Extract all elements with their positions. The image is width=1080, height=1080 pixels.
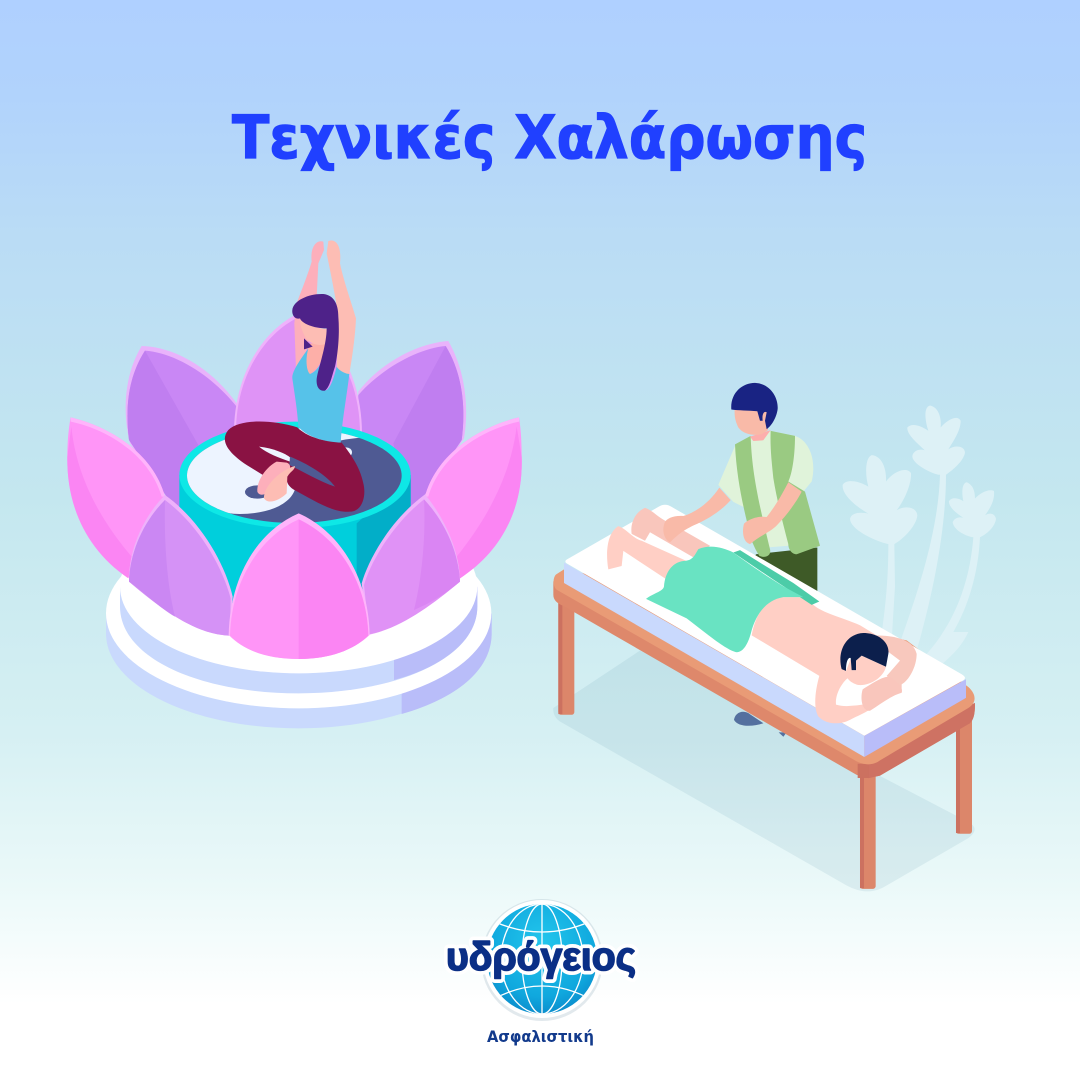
massage table xyxy=(553,505,975,889)
face and ear xyxy=(735,410,768,435)
frame top xyxy=(554,569,975,764)
back and near arm xyxy=(752,597,877,723)
hands xyxy=(861,677,902,711)
therapist body xyxy=(718,383,820,596)
far leg xyxy=(631,508,710,559)
face xyxy=(846,656,886,685)
logo tagline: Ασφαλιστική xyxy=(487,1027,594,1046)
vest xyxy=(735,436,770,557)
trousers xyxy=(753,547,817,596)
teal cylinder seat with yin-yang top xyxy=(179,422,411,603)
illustration: massage table scene xyxy=(553,383,996,891)
towel shadow xyxy=(733,550,819,605)
feet xyxy=(257,462,290,495)
raised arms xyxy=(294,241,324,370)
lower side petals xyxy=(129,494,460,636)
logo: Υδρόγειος xyxy=(446,899,636,1046)
hair xyxy=(840,633,889,671)
lotus base discs xyxy=(106,500,492,728)
floor shadow xyxy=(553,651,975,891)
logo globe xyxy=(481,899,603,1021)
hair xyxy=(731,383,778,429)
illustration: woman meditating on a lotus xyxy=(67,241,522,728)
far arm xyxy=(873,635,917,691)
logo wordmark: υδρόγειος xyxy=(446,935,636,979)
front centre petal xyxy=(229,513,370,659)
pants xyxy=(225,422,364,512)
hair and face xyxy=(304,338,313,349)
neck and chest xyxy=(306,343,327,375)
towel xyxy=(646,547,803,652)
neck xyxy=(750,430,771,441)
therapist's shoes xyxy=(734,712,787,737)
back purple petals xyxy=(126,313,466,517)
title: Τεχνικές Χαλάρωσης xyxy=(232,103,867,173)
front pink petals xyxy=(67,417,522,578)
legs xyxy=(558,600,972,889)
logo wordmark: υδρόγειος xyxy=(446,935,636,979)
frame sides xyxy=(553,581,975,778)
background plants xyxy=(843,405,996,666)
top xyxy=(292,348,349,443)
near leg xyxy=(607,526,687,580)
mattress sides xyxy=(564,563,864,757)
mattress top xyxy=(565,505,965,736)
woman figure xyxy=(225,241,364,512)
therapist's arms resting on the patient xyxy=(663,482,802,544)
shirt xyxy=(718,431,813,547)
patient xyxy=(607,508,917,723)
